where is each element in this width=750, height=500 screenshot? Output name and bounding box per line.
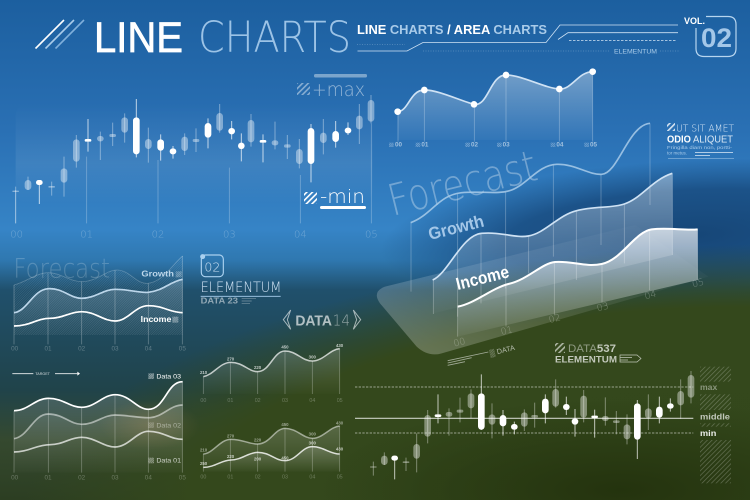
axis labels: 02 (152, 229, 164, 240)
axis labels: 02 (255, 398, 261, 404)
axis labels: 03 (282, 398, 288, 404)
growth area (433, 173, 672, 313)
axis labels: 01 (44, 346, 52, 353)
side hatch bars (700, 367, 731, 483)
white candle wicks (395, 374, 670, 479)
grey candle wicks (16, 95, 371, 223)
axis labels: 01 (80, 229, 93, 240)
title: CHARTS (198, 13, 351, 63)
axis labels: 00 (11, 474, 19, 481)
axis labels: 04 (294, 229, 307, 240)
axis labels: 03 (111, 474, 119, 481)
axis labels: 02 (78, 474, 86, 481)
heading: data14: DATA (295, 313, 332, 329)
axis labels (452, 277, 705, 350)
panel: perspective forecast chart (377, 123, 708, 365)
area fill (398, 72, 593, 140)
title: LINE (94, 14, 183, 62)
axis labels: 05 (337, 475, 343, 481)
header label elementum: ELEMENTUM (614, 48, 657, 56)
upper area (203, 426, 340, 472)
label: +max (297, 74, 367, 101)
max label: max (700, 383, 718, 392)
lower value labels: 200 (254, 457, 262, 462)
value labels: 300 (309, 354, 316, 359)
axis labels: 05 (179, 474, 186, 481)
lower value labels (200, 441, 344, 466)
axis labels (11, 346, 186, 353)
axis labels: 00 (200, 398, 206, 404)
forecast word: Forecast (13, 253, 110, 284)
x labels: 01 (421, 142, 429, 149)
growth label: Growth (141, 269, 174, 279)
axis lines (16, 123, 371, 223)
line (203, 349, 340, 377)
axis labels: 05 (337, 398, 343, 404)
text block: ut sit amet: Fringilla diam non, portti- (667, 145, 733, 150)
x labels (395, 142, 598, 149)
lower value labels: 250 (200, 461, 208, 466)
middle label: middle (700, 413, 731, 422)
axis labels: 04 (309, 398, 315, 404)
axis labels: 03 (596, 301, 610, 314)
header circuit lines (357, 25, 680, 51)
axis labels: 02 (548, 312, 562, 326)
heading block: elementum data 23 (200, 254, 281, 305)
heading: data14: 14 (333, 312, 350, 329)
value labels: 450 (281, 345, 289, 350)
data tag (448, 343, 516, 365)
data points (394, 68, 596, 115)
target arrow (12, 372, 80, 376)
panel: candlestick chart bottom (355, 367, 731, 483)
lower value labels: 300 (309, 441, 316, 446)
x labels: 03 (503, 142, 510, 149)
data tag: ▒ DATA (489, 343, 516, 358)
panel: double line value chart (200, 420, 344, 481)
elementum text: ELEMENTUM (201, 280, 281, 296)
subtitle: LINE CHARTS / AREA CHARTS (357, 23, 547, 37)
heading: data14 (283, 310, 361, 329)
x labels: 04 (556, 142, 564, 149)
upper line (203, 426, 340, 454)
axis labels: 01 (227, 398, 233, 404)
axis labels: 00 (452, 336, 467, 350)
growth line (14, 279, 183, 313)
axis labels: 04 (145, 346, 152, 353)
heading: data537 elementum (555, 343, 641, 366)
data 23 text: DATA 23 (201, 295, 238, 305)
grey candle bodies (12, 100, 374, 192)
axis labels (10, 229, 378, 240)
axis labels: 05 (179, 346, 186, 353)
value labels (200, 343, 344, 375)
growth area (14, 279, 183, 335)
lower line (203, 447, 340, 467)
axis labels: 02 (78, 346, 86, 353)
axis labels: 03 (223, 229, 236, 240)
panel: data 01 02 03 chart (11, 372, 186, 481)
axis labels: 05 (691, 277, 705, 290)
upper value labels: 430 (336, 420, 344, 425)
line (398, 72, 593, 112)
panel: single line value chart (200, 343, 344, 404)
lower area (203, 447, 340, 472)
axis labels: 02 (255, 475, 261, 481)
axis labels (200, 475, 343, 481)
number badge: 02 (204, 260, 220, 275)
forecast word: Forecast (383, 141, 542, 227)
data 02 area (14, 405, 183, 473)
white candle bodies (391, 393, 674, 461)
axis labels: 01 (227, 475, 233, 481)
heading: data537 elementum: ELEMENTUM (555, 354, 617, 366)
income label: Income (141, 314, 172, 324)
growth label: Growth (426, 211, 486, 244)
axis labels: 04 (145, 474, 152, 481)
grey candle wicks (373, 371, 691, 476)
data 03 label: Data 03 (156, 373, 181, 380)
volume badge: VOL. (684, 16, 705, 26)
min label: min (700, 429, 716, 438)
text block: ut sit amet: UT SIT AMET (676, 124, 734, 134)
perspective plate (377, 225, 708, 354)
lower value labels: 430 (336, 447, 344, 452)
axis labels: 00 (200, 475, 206, 481)
income label: Income (454, 261, 511, 294)
income line (458, 229, 698, 307)
data 01 line (14, 431, 183, 452)
income area (458, 229, 698, 337)
heading: data537 elementum: DATA537 (568, 343, 616, 355)
text block: ut sit amet (667, 123, 734, 158)
value labels: 220 (254, 365, 262, 370)
lower value labels: 450 (281, 455, 289, 460)
back series verticals (411, 123, 650, 317)
white candle bodies (36, 117, 351, 185)
axis labels: 00 (11, 346, 19, 353)
axis labels: 01 (500, 324, 514, 338)
growth line (433, 173, 672, 280)
panel: candlestick chart top (10, 95, 378, 240)
value labels: 210 (200, 370, 208, 375)
grey candle bodies (370, 375, 694, 468)
data 02 line (14, 405, 183, 439)
axis labels (11, 474, 186, 481)
upper value labels: 450 (281, 422, 289, 427)
panel: forecast growth income chart (11, 253, 186, 353)
axis labels (200, 398, 343, 404)
x labels: 00 (395, 142, 403, 149)
axis labels: 05 (365, 229, 378, 240)
value labels: 430 (336, 343, 344, 348)
upper value labels: 300 (309, 432, 316, 437)
text block: ut sit amet: ODIO ALIQUET (667, 134, 733, 146)
back series line (411, 123, 650, 223)
upper value labels: 220 (254, 437, 262, 442)
value labels: 270 (227, 356, 235, 361)
data 03 area (14, 382, 183, 473)
axis labels: 01 (44, 474, 52, 481)
max min reference lines (355, 387, 693, 433)
title (94, 13, 351, 63)
upper value labels: 210 (200, 447, 208, 452)
axis labels: 04 (309, 475, 315, 481)
x labels: 02 (471, 142, 479, 149)
income line (14, 306, 183, 326)
axis labels: 04 (643, 289, 658, 302)
faint line (14, 256, 183, 285)
label: +max: +max (312, 79, 365, 101)
x labels: 05 (590, 142, 598, 149)
volume badge: 02 (701, 23, 732, 53)
label: -min (304, 186, 366, 209)
upper value labels (200, 420, 344, 452)
axis labels: 00 (10, 229, 23, 240)
upper value labels: 270 (227, 433, 235, 438)
lower value labels: 220 (227, 454, 235, 459)
axis labels: 03 (282, 475, 288, 481)
data 01 label: Data 01 (156, 458, 181, 465)
text block: ut sit amet: tor metus. (667, 150, 687, 156)
label: -min: -min (320, 186, 365, 208)
area fill (203, 349, 340, 394)
axis labels: 03 (111, 346, 119, 353)
volume badge (684, 16, 736, 56)
data 03 line (14, 382, 183, 411)
data 02 label: Data 02 (156, 422, 181, 429)
target arrow: TARGET (35, 372, 51, 376)
title icon: diagonal slashes (36, 20, 84, 48)
panel: area chart top right (389, 68, 598, 149)
white candle wicks (39, 99, 348, 204)
hatched area (14, 256, 183, 335)
